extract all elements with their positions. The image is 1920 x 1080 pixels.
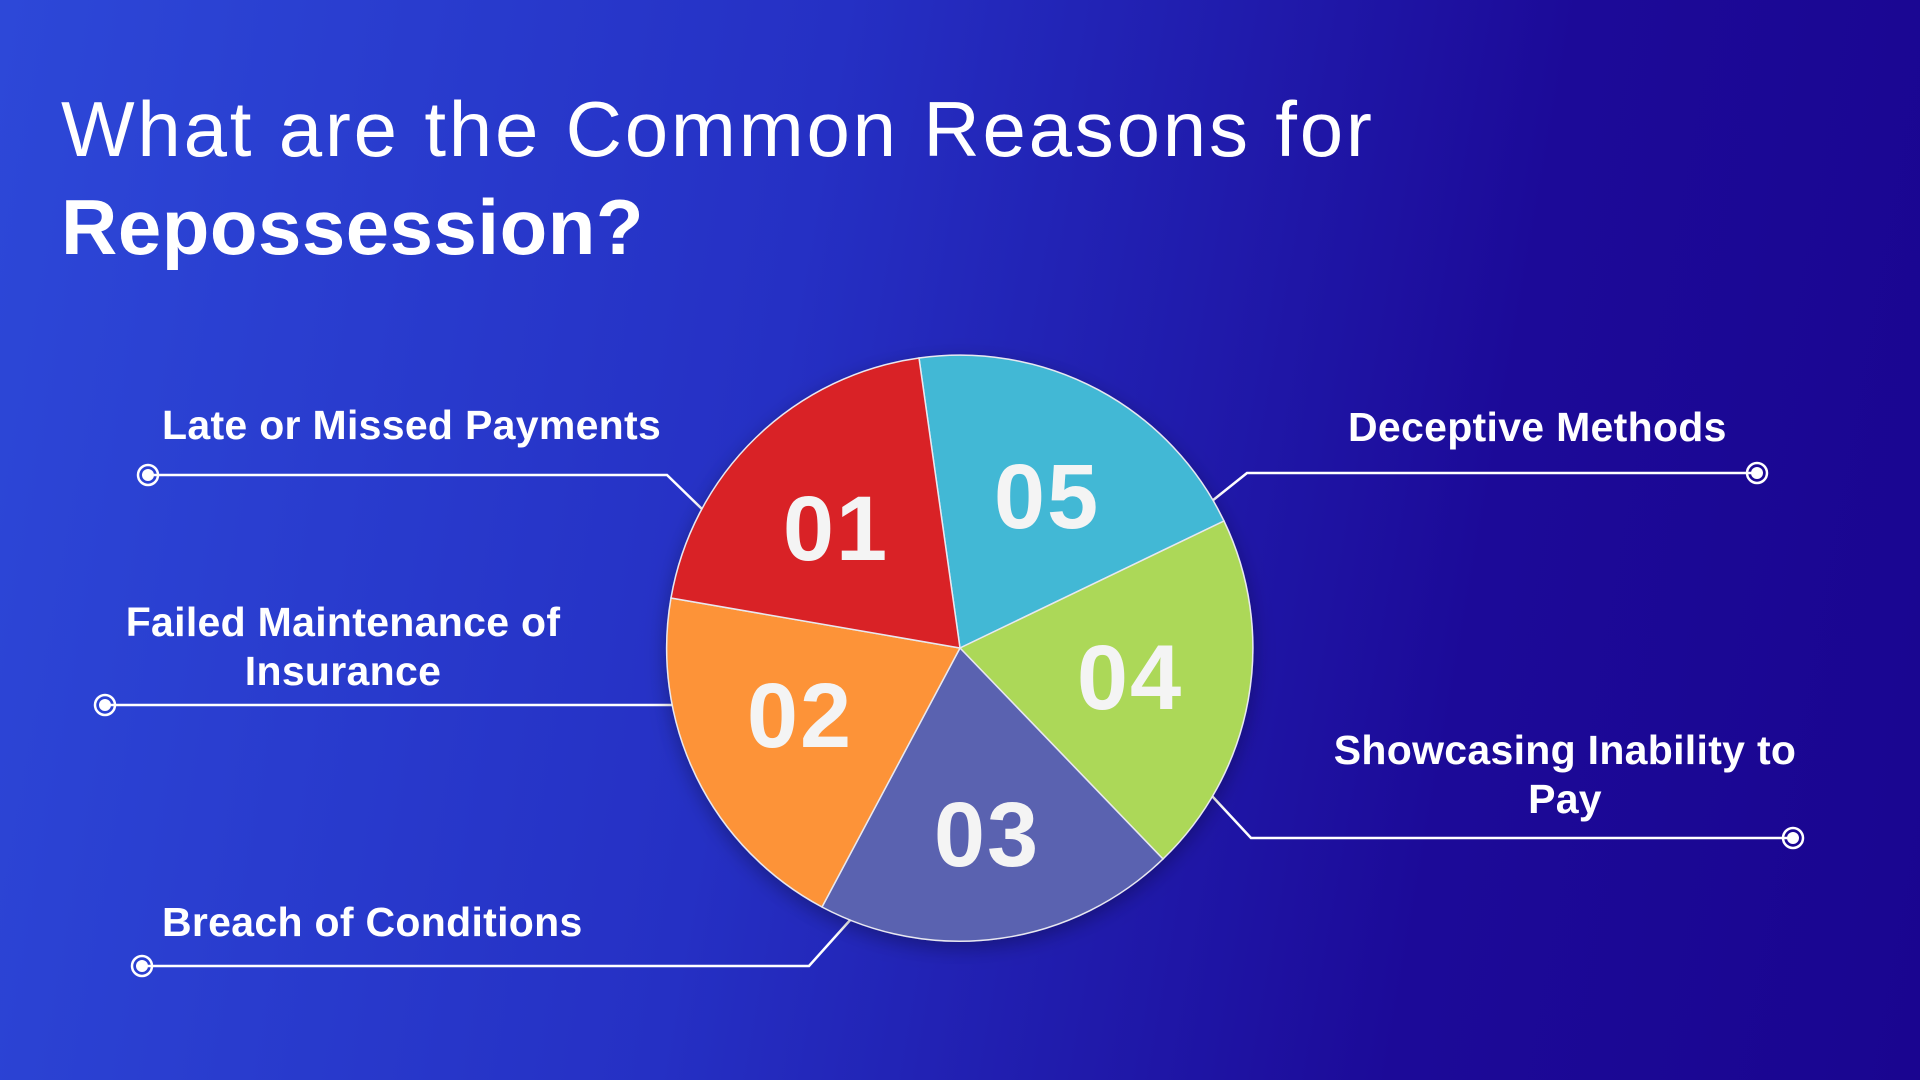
label: Showcasing Inability to Pay: Showcasing Inability to [1334, 727, 1796, 773]
label: Late or Missed Payments: Late or Missed Payments [162, 402, 661, 448]
label: Failed Maintenance of Insurance: Failed Maintenance of [126, 599, 560, 645]
label: Showcasing Inability to Pay: Pay [1528, 776, 1602, 822]
title: Repossession? [61, 183, 644, 271]
pie chart: 04 [1077, 627, 1183, 729]
slice 05 [919, 355, 1224, 648]
label: Showcasing Inability to Pay [1334, 727, 1796, 822]
slice 04 [960, 521, 1253, 859]
label: Deceptive Methods: Deceptive Methods [1348, 404, 1727, 450]
slice 03 [822, 648, 1163, 941]
slice 02 [667, 598, 960, 907]
title [61, 85, 1375, 271]
pie chart: 01 [783, 478, 889, 580]
pie chart: 03 [934, 784, 1040, 886]
slice 01 [671, 358, 960, 648]
pie chart: 05 [994, 446, 1100, 548]
pie chart: 02 [747, 665, 853, 767]
label: Failed Maintenance of Insurance [126, 599, 560, 694]
title: What are the Common Reasons for [61, 85, 1375, 173]
label: Failed Maintenance of Insurance: Insurance [245, 648, 441, 694]
label: Breach of Conditions: Breach of Conditions [162, 899, 583, 945]
